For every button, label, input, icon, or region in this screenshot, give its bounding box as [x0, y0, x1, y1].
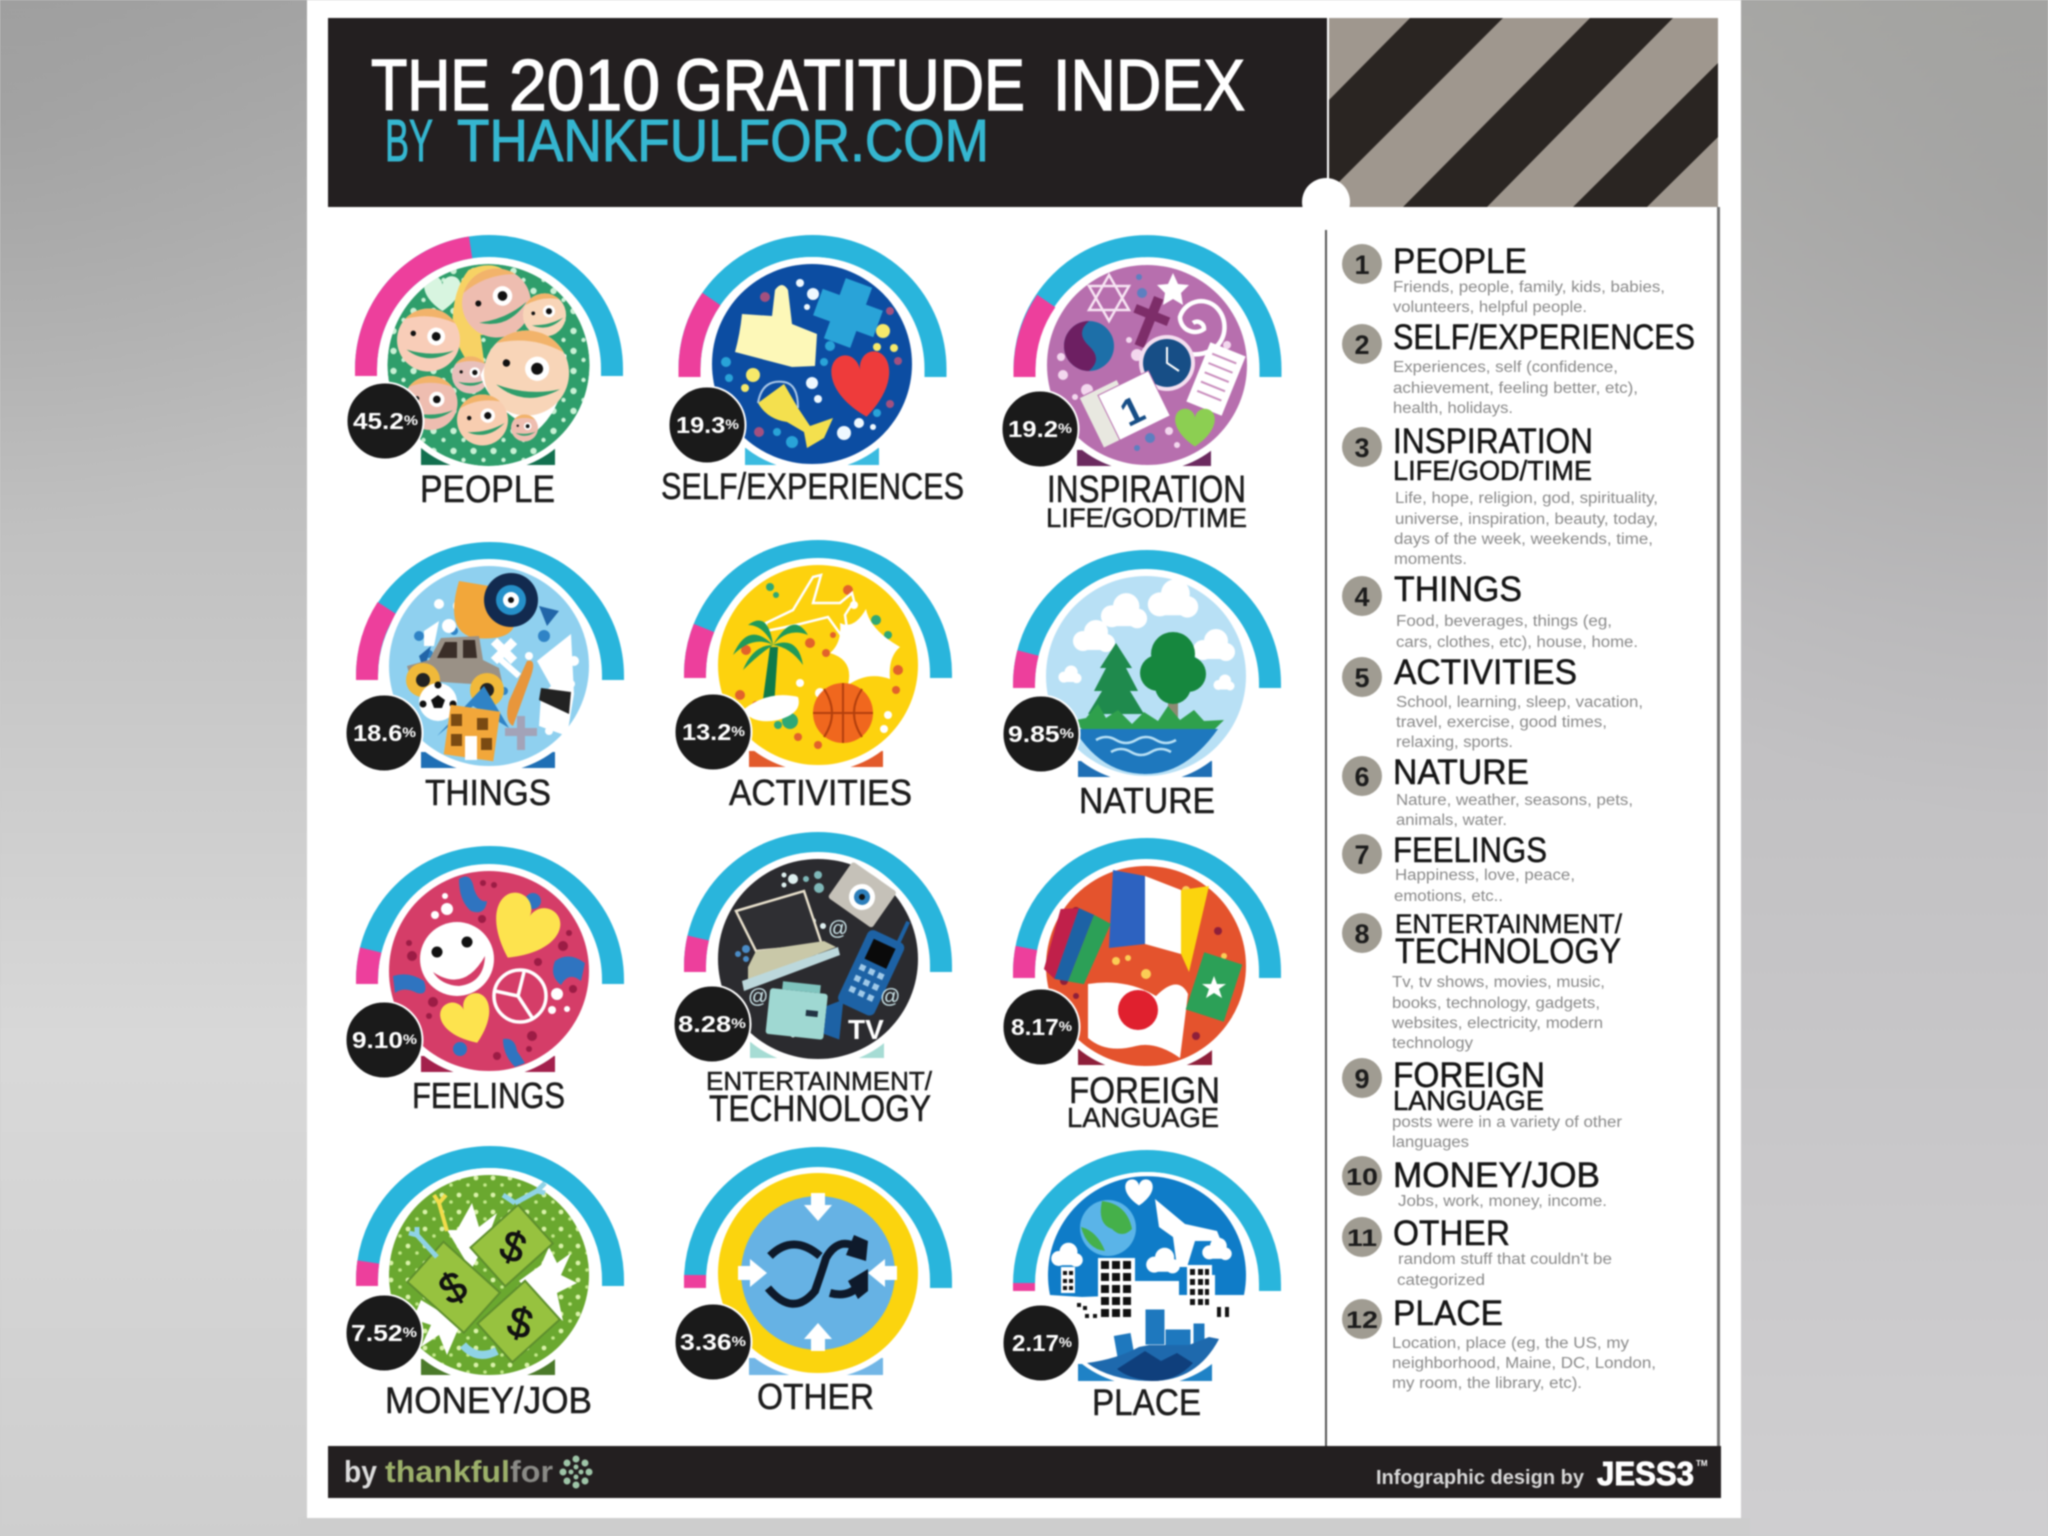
legend item 12: place: my room, the library, etc).: [1392, 1375, 1582, 1392]
legend item 11: other: 11: [1347, 1225, 1377, 1252]
diagonal stripes panel: [1329, 18, 1718, 207]
legend item 6: nature: Nature, weather, seasons, pets,: [1396, 792, 1633, 809]
legend item 7: feelings: Happiness, love, peace,: [1395, 867, 1575, 884]
badge: 8.28%: [674, 986, 750, 1062]
legend item 10: money/job: [1342, 1156, 1607, 1210]
legend item 3: inspiration: INSPIRATION: [1393, 422, 1593, 461]
gauge arc: 19.3%: [690, 246, 936, 377]
badge: 9.85%: 9.85: [1008, 721, 1053, 747]
legend item 12: place: [1342, 1294, 1656, 1392]
footer logo: jess3: JESS3: [1597, 1455, 1694, 1492]
legend item 11: other: random stuff that couldn't be: [1398, 1251, 1612, 1268]
legend column: [1342, 242, 1695, 1392]
badge: 19.3%: [668, 386, 746, 464]
footer credit: by thankfulfor: [344, 1454, 553, 1489]
label: other: OTHER: [757, 1376, 874, 1417]
legend item 4: things: 4: [1354, 582, 1370, 612]
icon: thankfulfor snowflake: [560, 1456, 592, 1488]
label: inspiration life/god/time: LIFE/GOD/TIME: [1046, 503, 1247, 533]
legend item 4: things: THINGS: [1394, 570, 1522, 609]
badge: 19.2%: %: [1058, 420, 1073, 436]
badge: 45.2%: %: [404, 412, 419, 428]
footer credit: by thankfulfor: by: [344, 1454, 378, 1489]
title: the 2010 gratitude index: INDEX: [1053, 46, 1245, 126]
badge: 7.52%: %: [403, 1324, 418, 1340]
globe: laptop, camera, phone, tv: TV: [848, 1014, 884, 1045]
globe: flags: [1043, 866, 1246, 1066]
legend item 9: foreign language: [1342, 1056, 1622, 1151]
legend item 12: place: PLACE: [1393, 1294, 1503, 1333]
legend item 12: place: Location, place (eg, the US, my: [1392, 1335, 1629, 1352]
label: activities: ACTIVITIES: [729, 772, 912, 813]
legend item 5: activities: 5: [1354, 663, 1370, 693]
label: money/job: MONEY/JOB: [385, 1380, 592, 1421]
gauge arc: 2.17%: [1024, 1161, 1270, 1291]
badge: 9.10%: %: [403, 1031, 418, 1047]
legend item 2: self/experiences: achievement, feeling better, etc),: [1393, 380, 1638, 397]
legend item 2: self/experiences: [1342, 318, 1695, 417]
legend item 9: foreign language: 9: [1354, 1064, 1370, 1094]
panel: activities: [674, 551, 941, 813]
legend item 8: entertainment/technology: 8: [1354, 919, 1370, 949]
legend item 3: inspiration: days of the week, weekends, time,: [1394, 531, 1653, 548]
gauge arc: 9.10%: [367, 857, 613, 984]
footer bar: [328, 1446, 1721, 1498]
legend item 1: people: [1342, 242, 1665, 316]
title: the 2010 gratitude index: GRATITUDE: [675, 46, 1025, 126]
globe: laptop, camera, phone, tv: @: [828, 918, 848, 940]
label: things: THINGS: [425, 772, 551, 813]
globe: money and tools: $: [494, 1220, 532, 1273]
white poster panel: [307, 0, 1741, 1518]
badge: 2.17%: %: [1059, 1334, 1073, 1350]
badge: 9.85%: %: [1060, 725, 1075, 741]
notch circle: [1302, 178, 1350, 226]
label: foreign language: FOREIGN: [1069, 1070, 1220, 1111]
legend item 7: feelings: 7: [1354, 840, 1370, 870]
globe: laptop, camera, phone, tv: [718, 859, 918, 1059]
legend item 3: inspiration: moments.: [1394, 551, 1467, 568]
title: the 2010 gratitude index: [371, 46, 1245, 126]
badge: 19.3%: %: [725, 416, 740, 432]
legend item 4: things: cars, clothes, etc), house, home.: [1396, 634, 1638, 651]
legend item 8: entertainment/technology: books, technology, gadgets,: [1392, 995, 1600, 1012]
badge: 3.36%: [674, 1304, 752, 1380]
legend item 6: nature: [1342, 753, 1633, 829]
gauge arc: 18.6%: [367, 553, 613, 680]
label: entertainment/technology: TECHNOLOGY: [709, 1088, 931, 1129]
legend item 11: other: [1342, 1214, 1612, 1289]
legend item 7: feelings: emotions, etc..: [1394, 888, 1503, 905]
footer logo: jess3: TM: [1696, 1459, 1708, 1468]
legend item 9: foreign language: FOREIGN: [1393, 1056, 1545, 1095]
panel: people: [346, 246, 612, 511]
legend item 10: money/job: MONEY/JOB: [1393, 1156, 1600, 1195]
legend item 8: entertainment/technology: websites, electricity, modern: [1391, 1015, 1603, 1032]
legend item 5: activities: travel, exercise, good times,: [1396, 714, 1607, 731]
gauge arc: 19.2%: [1024, 246, 1270, 377]
legend item 2: self/experiences: SELF/EXPERIENCES: [1393, 318, 1695, 357]
legend item 9: foreign language: languages: [1392, 1134, 1469, 1151]
globe: money and tools: [389, 1175, 589, 1375]
footer credit: infographic design by: Infographic design by: [1376, 1467, 1585, 1489]
badge: 8.28%: 8.28: [678, 1011, 723, 1037]
badge: 7.52%: [346, 1294, 422, 1372]
label: entertainment/technology: ENTERTAINMENT/: [706, 1066, 933, 1096]
legend item 10: money/job: 10: [1346, 1164, 1378, 1191]
legend item 7: feelings: [1342, 831, 1575, 905]
legend item 5: activities: [1342, 653, 1643, 751]
legend item 6: nature: animals, water.: [1396, 812, 1507, 829]
panel: place: [1002, 1161, 1270, 1423]
legend item 4: things: [1342, 570, 1638, 651]
panel: money/job: [346, 1157, 613, 1421]
globe: city skyline: [1048, 1176, 1246, 1381]
badge: 18.6%: [346, 694, 422, 772]
badge: 9.10%: 9.10: [352, 1027, 397, 1053]
panel: entertainment/technology: [674, 843, 941, 1129]
legend item 10: money/job: Jobs, work, money, income.: [1398, 1193, 1607, 1210]
label: place: PLACE: [1092, 1382, 1201, 1423]
panel: inspiration: [1002, 246, 1270, 533]
legend item 8: entertainment/technology: technology: [1392, 1035, 1473, 1052]
legend item 8: entertainment/technology: Tv, tv shows, movies, music,: [1392, 974, 1605, 991]
gauge arc: 45.2%: [366, 246, 612, 376]
badge: 8.17%: %: [1059, 1018, 1073, 1034]
globe: shuffle icon: [718, 1173, 918, 1373]
footer credit: by thankfulfor: for: [510, 1454, 553, 1489]
legend item 12: place: 12: [1346, 1307, 1378, 1334]
subtitle: by thankfulfor.com: BY: [385, 108, 433, 174]
label: self/experiences: SELF/EXPERIENCES: [661, 466, 964, 507]
gauge arc: 3.36%: [695, 1158, 941, 1288]
panel: foreign language: [1002, 849, 1270, 1133]
badge: 13.2%: 13.2: [682, 719, 727, 745]
panel: nature: [1002, 561, 1270, 821]
gauge arc: 9.85%: [1024, 561, 1270, 688]
legend item 2: self/experiences: Experiences, self (confidence,: [1393, 359, 1618, 376]
legend item 3: inspiration: [1342, 422, 1658, 568]
legend item 6: nature: 6: [1354, 762, 1370, 792]
globe: laptop, camera, phone, tv: @: [880, 986, 900, 1008]
label: feelings: FEELINGS: [412, 1075, 565, 1116]
badge: 8.28%: %: [731, 1015, 747, 1031]
legend item 4: things: Food, beverages, things (eg,: [1396, 613, 1612, 630]
legend item 1: people: Friends, people, family, kids, babies,: [1393, 279, 1665, 296]
badge: 18.6%: %: [402, 724, 417, 740]
legend item 9: foreign language: LANGUAGE: [1393, 1085, 1544, 1116]
legend item 7: feelings: FEELINGS: [1393, 831, 1547, 870]
legend item 8: entertainment/technology: [1342, 909, 1622, 1052]
legend item 8: entertainment/technology: TECHNOLOGY: [1395, 932, 1621, 971]
legend item 5: activities: School, learning, sleep, vacation,: [1396, 694, 1643, 711]
label: foreign language: [1067, 1070, 1220, 1133]
panel: self/experiences: [661, 246, 964, 507]
globe: plane, palm, pillow, basketball: [718, 565, 918, 765]
globe: money and tools: $: [503, 1297, 537, 1348]
globe: trees and water: [1046, 576, 1246, 776]
title: the 2010 gratitude index: 2010: [509, 46, 660, 126]
gauge arc: 8.17%: [1024, 849, 1270, 978]
legend item 1: people: PEOPLE: [1393, 242, 1527, 281]
globe: spiritual symbols: 1: [1114, 388, 1151, 435]
badge: 45.2%: [346, 382, 424, 460]
legend item 3: inspiration: 3: [1354, 433, 1370, 463]
label: foreign language: LANGUAGE: [1067, 1102, 1219, 1133]
legend item 11: other: OTHER: [1393, 1214, 1510, 1253]
label: nature: NATURE: [1079, 780, 1215, 821]
badge: 19.2%: 19.2: [1008, 416, 1053, 442]
label: inspiration life/god/time: [1046, 469, 1247, 533]
badge: 13.2%: [674, 694, 752, 770]
subtitle: by thankfulfor.com: THANKFULFOR.COM: [457, 108, 989, 174]
legend item 2: self/experiences: 2: [1354, 330, 1370, 360]
globe: faces: [388, 259, 590, 466]
label: people: PEOPLE: [420, 469, 555, 511]
badge: 9.10%: [346, 1002, 422, 1078]
legend item 3: inspiration: LIFE/GOD/TIME: [1393, 455, 1592, 486]
panel: other: [674, 1158, 941, 1417]
badge: 3.36%: 3.36: [680, 1329, 725, 1355]
badge: 2.17%: [1002, 1304, 1080, 1382]
legend item 2: self/experiences: health, holidays.: [1393, 400, 1513, 417]
title banner: [328, 18, 1327, 207]
badge: 9.85%: [1002, 696, 1080, 772]
badge: 8.17%: [1002, 988, 1080, 1066]
gauge arc: 13.2%: [695, 551, 941, 678]
panel: feelings: [346, 857, 613, 1116]
background: bottom strip: [300, 1518, 1750, 1536]
legend item 1: people: 1: [1354, 250, 1370, 280]
globe: car, ball, house, bottle: [389, 566, 589, 766]
badge: 2.17%: 2.17: [1012, 1330, 1057, 1356]
legend item 5: activities: ACTIVITIES: [1394, 653, 1577, 692]
badge: 7.52%: 7.52: [351, 1320, 396, 1346]
globe: money and tools: $: [431, 1261, 475, 1314]
gauge arc: 7.52%: [367, 1157, 613, 1286]
badge: 45.2%: 45.2: [353, 408, 398, 434]
title: the 2010 gratitude index: THE: [371, 46, 490, 126]
badge: 19.2%: [1002, 390, 1078, 468]
legend item 6: nature: NATURE: [1393, 753, 1529, 792]
badge: 8.17%: 8.17: [1011, 1014, 1056, 1040]
label: entertainment/technology: [706, 1066, 933, 1129]
footer credit: by thankfulfor: thankful: [385, 1454, 510, 1489]
globe: smile, hearts, peace sign: [389, 871, 589, 1071]
legend item 8: entertainment/technology: ENTERTAINMENT/: [1395, 909, 1622, 939]
legend item 3: inspiration: universe, inspiration, beauty, today,: [1395, 511, 1658, 528]
background: left gradient: [0, 0, 308, 1536]
globe: thumbs up, cross, heart, trophy: [712, 264, 912, 464]
legend item 5: activities: relaxing, sports.: [1396, 734, 1513, 751]
globe: laptop, camera, phone, tv: @: [748, 986, 768, 1008]
badge: 19.3%: 19.3: [676, 412, 721, 438]
badge: 18.6%: 18.6: [353, 720, 398, 746]
legend item 1: people: volunteers, helpful people.: [1393, 299, 1587, 316]
legend item 3: inspiration: Life, hope, religion, god, spirituality,: [1395, 490, 1658, 507]
legend item 9: foreign language: posts were in a variety of other: [1392, 1114, 1622, 1131]
badge: 3.36%: %: [732, 1333, 747, 1349]
label: inspiration life/god/time: INSPIRATION: [1047, 469, 1246, 511]
legend item 12: place: neighborhood, Maine, DC, London,: [1392, 1355, 1656, 1372]
background: right gradient: [1740, 0, 2048, 1536]
gauge arc: 8.28%: [695, 843, 941, 972]
legend item 11: other: categorized: [1397, 1272, 1485, 1289]
badge: 13.2%: %: [731, 723, 746, 739]
globe: spiritual symbols: [1047, 265, 1247, 465]
panel: things: [346, 553, 613, 813]
